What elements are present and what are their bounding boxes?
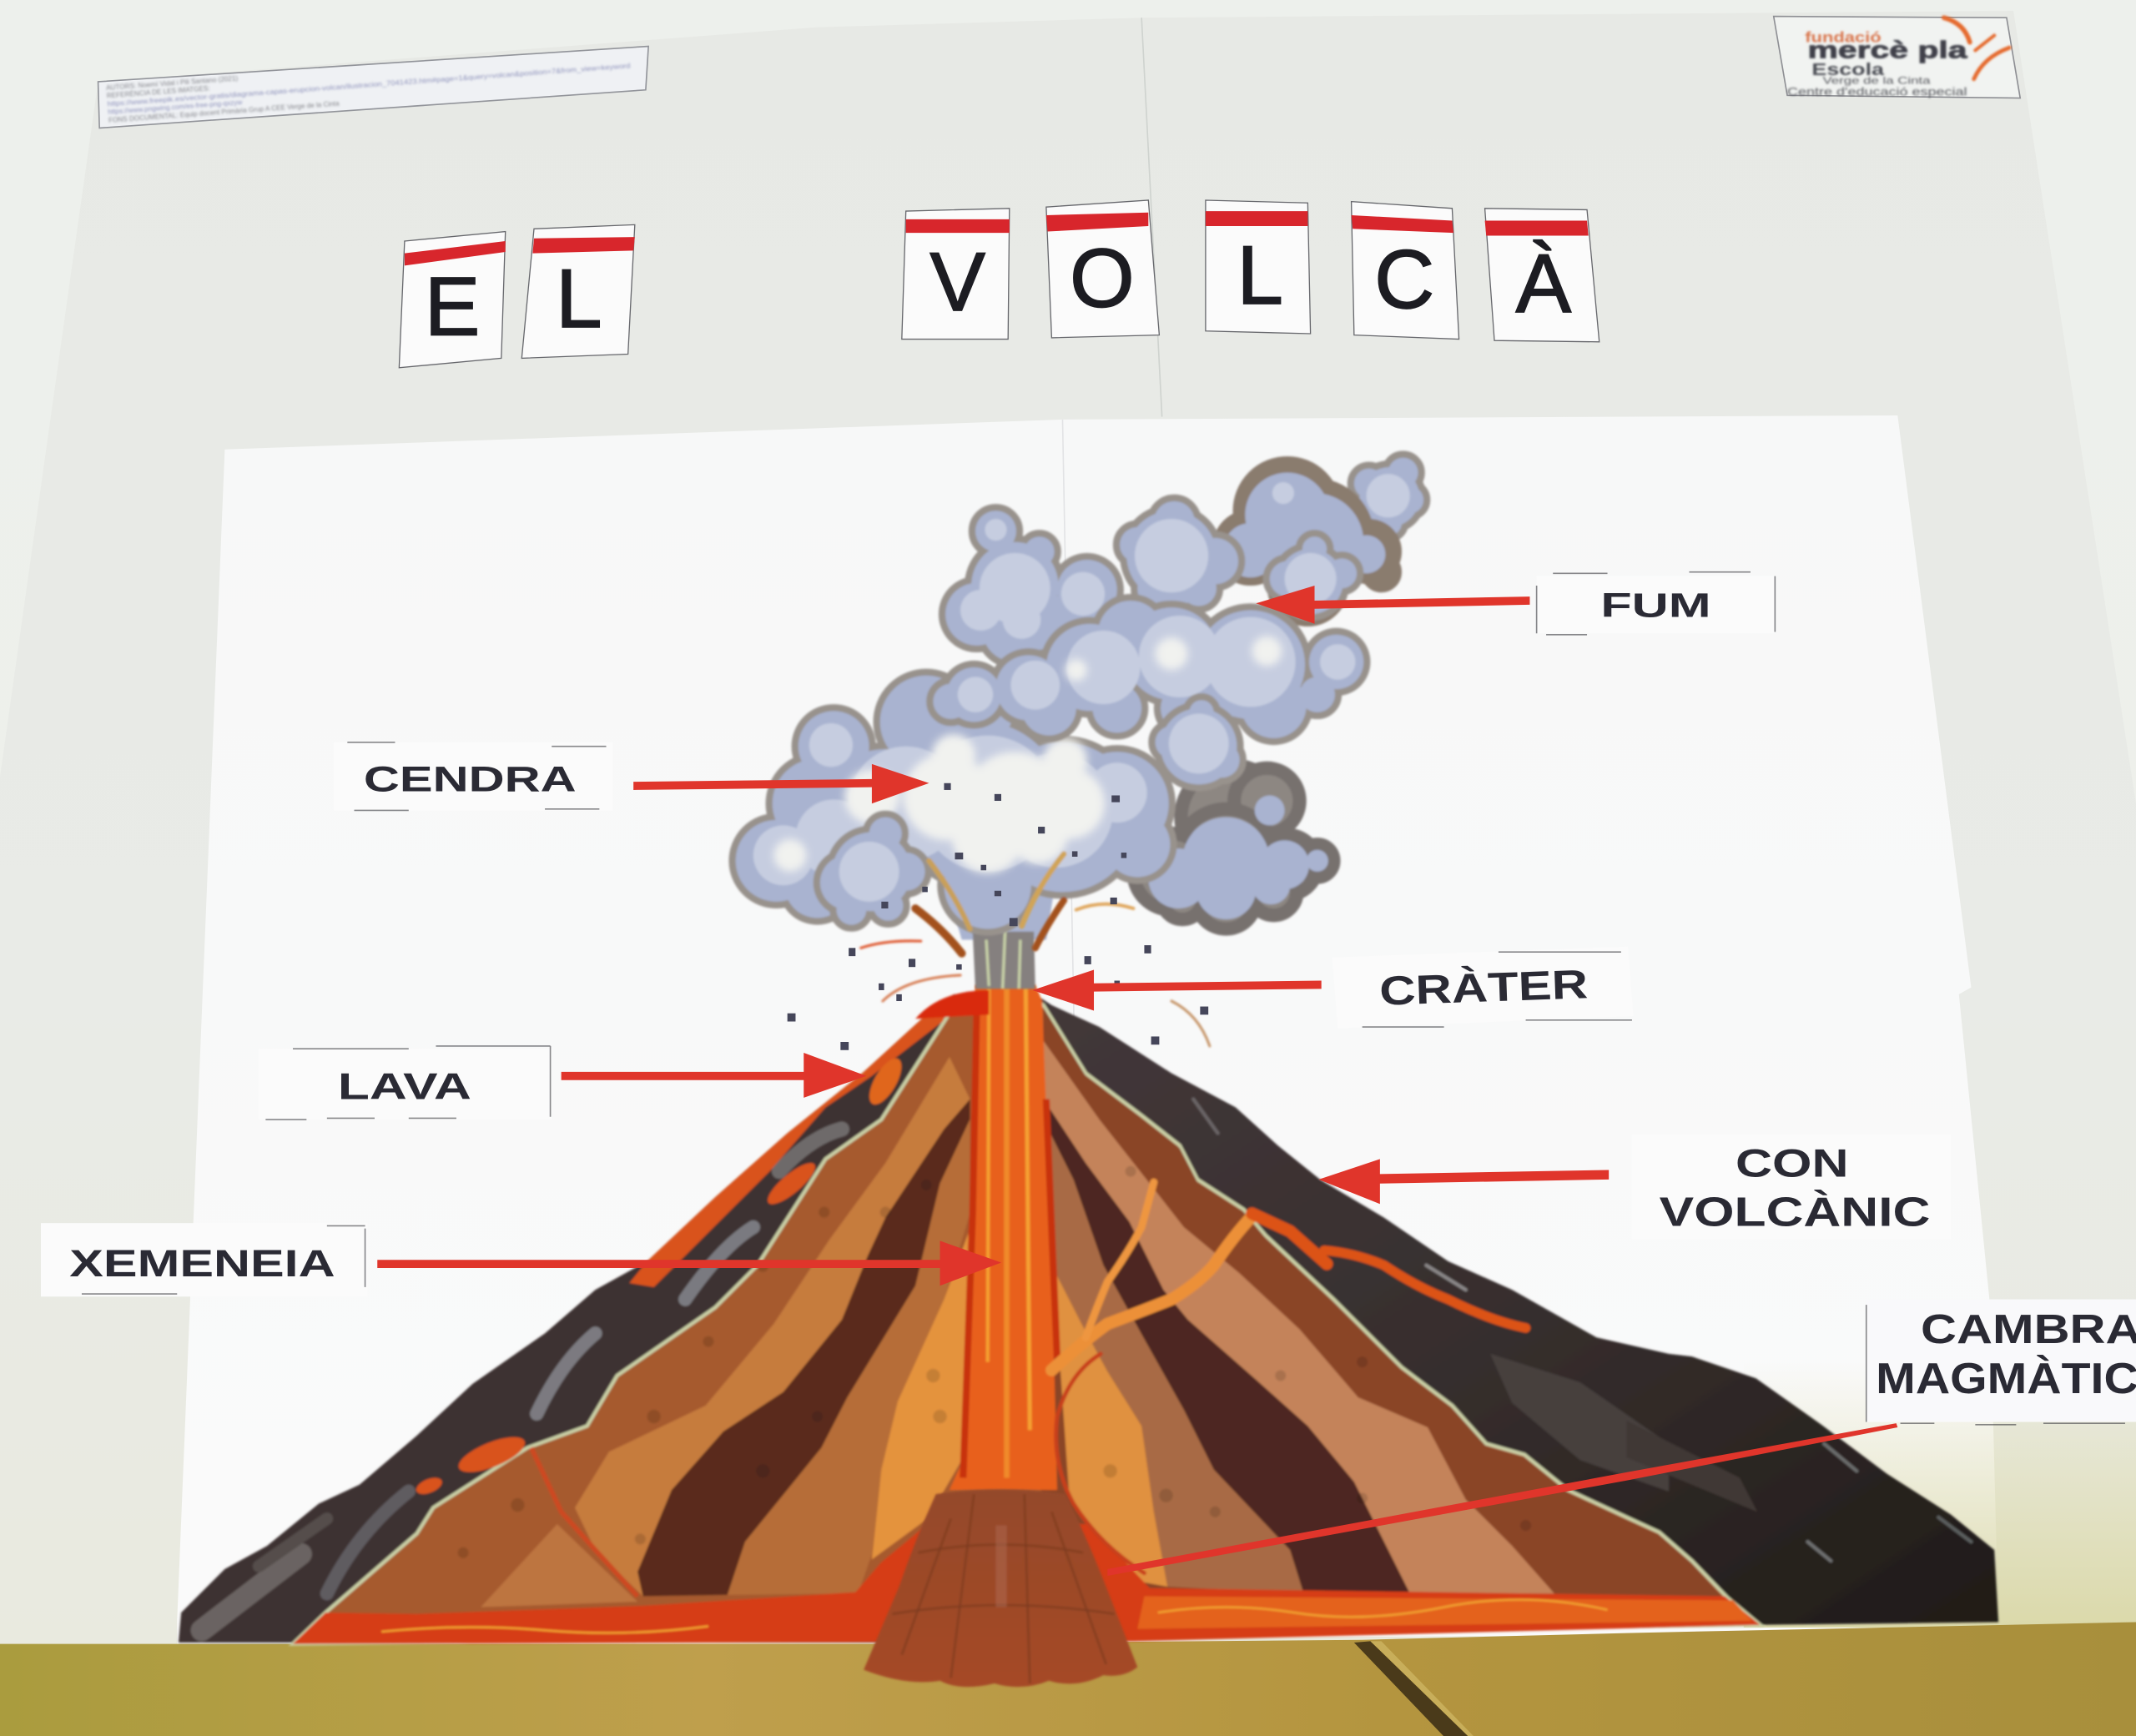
card E <box>399 232 506 368</box>
school logo <box>1774 17 2020 98</box>
plume flames <box>861 854 1210 1046</box>
right tan band <box>1044 1120 1303 1593</box>
chimney <box>950 984 1057 1490</box>
lower right warm light <box>1744 1362 2136 1628</box>
card O: O <box>1070 232 1135 325</box>
arrow: CENDRA <box>633 764 929 803</box>
school logo: Escola <box>1811 61 1885 79</box>
layer speckles <box>458 1166 1531 1558</box>
card V: V <box>930 236 985 329</box>
label: CRÀTER <box>1332 947 1634 1029</box>
paper seam <box>1062 420 1083 1498</box>
left light band <box>575 1057 970 1596</box>
board centre seam <box>1141 18 1162 417</box>
credits label: REFERÈNCIA DE LES IMATGES: <box>106 83 210 100</box>
credits label: AUTORS: Noemí Vidal i Pili Santano (2021) <box>106 74 239 92</box>
label: LAVA: LAVA <box>338 1067 471 1108</box>
ash particles <box>788 783 1208 1050</box>
cloud: far right puff <box>1354 458 1423 536</box>
credits label: FONS DOCUMENTAL: Equip docent Primària Grup A CEE Verge de la Cinta <box>108 100 340 124</box>
label: CENDRA <box>334 742 613 810</box>
card E: E <box>425 261 480 354</box>
magma chamber band <box>293 1524 1760 1644</box>
right rock slope <box>1035 994 1998 1634</box>
label: CAMBRA MAGMÀTICA <box>1866 1300 2136 1425</box>
title: EL VOLCÀ <box>399 200 1599 368</box>
card O <box>1046 200 1159 338</box>
magma squiggles <box>381 1600 1608 1633</box>
right rock grey facets <box>1490 1354 1757 1512</box>
school logo: Centre d'educació especial <box>1787 84 1967 98</box>
right pale band <box>1040 1035 1554 1593</box>
cloud: upper left <box>945 511 1117 662</box>
label: LAVA <box>259 1046 552 1120</box>
label: FUM: FUM <box>1600 586 1711 625</box>
arrow: LAVA <box>562 1053 866 1098</box>
cloud: long middle <box>933 601 1363 738</box>
crater rim <box>915 990 989 1019</box>
label: XEMENEIA: XEMENEIA <box>69 1242 335 1285</box>
card C <box>1352 202 1459 340</box>
cloud: small lower left <box>820 818 925 925</box>
arrow: CON VOLCÀNIC <box>1318 1159 1609 1204</box>
card À <box>1485 209 1599 342</box>
right dark band <box>1044 1099 1410 1593</box>
right dykes <box>1051 1182 1526 1573</box>
arrow: FUM <box>1256 586 1529 624</box>
card L <box>521 224 635 358</box>
left rock slope <box>179 994 995 1643</box>
label: CRÀTER: CRÀTER <box>1378 962 1589 1014</box>
arrow: XEMENEIA <box>377 1240 1001 1286</box>
cloud: upper middle <box>1120 501 1238 616</box>
magma chamber right glow <box>1137 1596 1752 1629</box>
rock streaks <box>202 1099 1971 1630</box>
right outer layer <box>1040 1008 1722 1596</box>
credits label <box>98 46 648 128</box>
right orange band <box>1051 1266 1167 1587</box>
label: CAMBRA MAGMÀTICA: CAMBRA <box>1921 1307 2136 1352</box>
cloud: small centre right <box>1155 700 1240 784</box>
left tan band <box>728 1120 970 1595</box>
label: XEMENEIA <box>41 1223 368 1296</box>
left orange band <box>872 1233 969 1559</box>
arrow: CRÀTER <box>1033 969 1322 1010</box>
school logo: fundació <box>1805 29 1882 46</box>
cloud: small upper right <box>1270 536 1357 614</box>
label: CON VOLCÀNIC: VOLCÀNIC <box>1660 1190 1930 1235</box>
lava lumps <box>414 1054 908 1497</box>
left dark band <box>637 1099 970 1596</box>
credits label: https://www.freepik.es/vector-gratis/diagrama-capas-erupcion-volcan/ilustracion_7041423.htm#page=1&query=volcan&position=7&from_view=keyword <box>107 62 631 108</box>
card L: L <box>556 253 602 345</box>
card V <box>902 209 1010 340</box>
cloud: lower right <box>1133 766 1333 928</box>
left lower wedge <box>481 1524 637 1608</box>
paper volcano model <box>864 1489 1137 1687</box>
white paper sheet <box>177 415 1998 1644</box>
label: CENDRA: CENDRA <box>364 760 577 799</box>
volcano illustration <box>179 984 1998 1644</box>
card À: À <box>1516 238 1572 330</box>
card L <box>1206 200 1311 334</box>
left dyke <box>531 1448 637 1596</box>
card C: C <box>1374 234 1434 326</box>
left lava flow <box>629 994 954 1287</box>
cross-section <box>293 1001 1760 1644</box>
label: FUM <box>1537 572 1775 635</box>
smoke clouds <box>736 458 1423 1046</box>
cloud: large lower <box>736 676 1170 928</box>
credits label: https://www.pngwing.com/es-free-png-qxzyw <box>108 98 243 116</box>
table <box>0 1623 2136 1736</box>
eruption column <box>940 863 1059 989</box>
school logo: Verge de la Cinta <box>1822 75 1931 87</box>
card L: L <box>1237 229 1283 322</box>
school logo: mercè pla <box>1808 37 1968 63</box>
chimney stripes <box>963 988 1057 1477</box>
arrow: CAMBRA MAGMÀTICA <box>1107 1423 1897 1576</box>
label: CON VOLCÀNIC <box>1632 1135 1951 1240</box>
label: CON VOLCÀNIC: CON <box>1736 1142 1849 1186</box>
cloud: upper right <box>1221 465 1393 618</box>
